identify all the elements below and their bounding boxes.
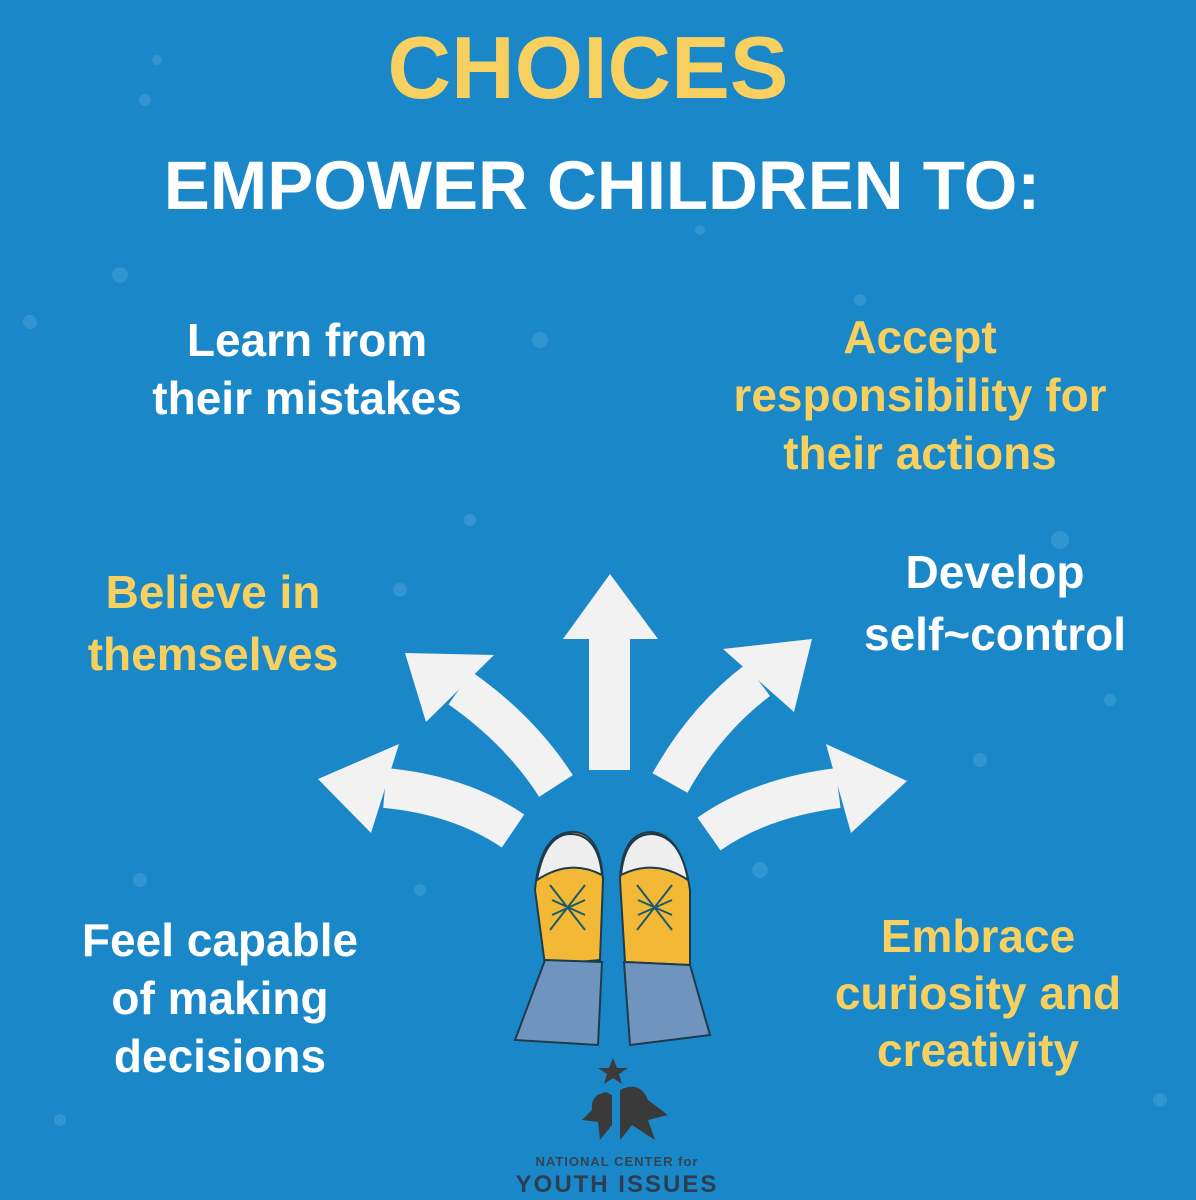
shoe right	[620, 832, 710, 1045]
text: embrace curiosity: creativity	[877, 1024, 1079, 1076]
arrow: left	[318, 744, 513, 833]
logo: NATIONAL CENTER for	[536, 1154, 698, 1169]
text: accept responsibility	[733, 311, 1107, 479]
text: feel capable: Feel capable	[82, 914, 358, 966]
text: feel capable: decisions	[114, 1030, 326, 1082]
logo	[516, 1058, 718, 1198]
text: feel capable	[82, 914, 358, 1082]
text: embrace curiosity	[835, 910, 1121, 1076]
text: accept responsibility: Accept	[843, 311, 997, 363]
text: learn from mistakes	[152, 314, 462, 424]
text: believe in themselves: Believe in	[106, 566, 320, 618]
logo: YOUTH ISSUES	[516, 1171, 718, 1198]
text: learn from mistakes: their mistakes	[152, 372, 462, 424]
text: embrace curiosity: curiosity and	[835, 967, 1121, 1019]
text: believe in themselves: themselves	[88, 628, 338, 680]
text: accept responsibility: their actions	[783, 427, 1057, 479]
text: believe in themselves	[88, 566, 338, 680]
shoe left	[515, 832, 603, 1045]
shoes	[515, 832, 710, 1045]
subtitle: EMPOWER CHILDREN TO:	[164, 147, 1040, 224]
text: feel capable: of making	[111, 972, 329, 1024]
arrow: right	[709, 744, 907, 834]
arrow: upper right	[670, 639, 812, 783]
arrow: up	[563, 574, 658, 770]
text: learn from mistakes: Learn from	[187, 314, 427, 366]
title: CHOICES	[388, 18, 788, 117]
text: develop self-control	[864, 546, 1126, 660]
arrow: upper left	[405, 653, 556, 786]
text: accept responsibility: responsibility for	[733, 369, 1107, 421]
text: develop self-control: Develop	[906, 546, 1084, 598]
text: embrace curiosity: Embrace	[881, 910, 1075, 962]
text: develop self-control: self~control	[864, 608, 1126, 660]
